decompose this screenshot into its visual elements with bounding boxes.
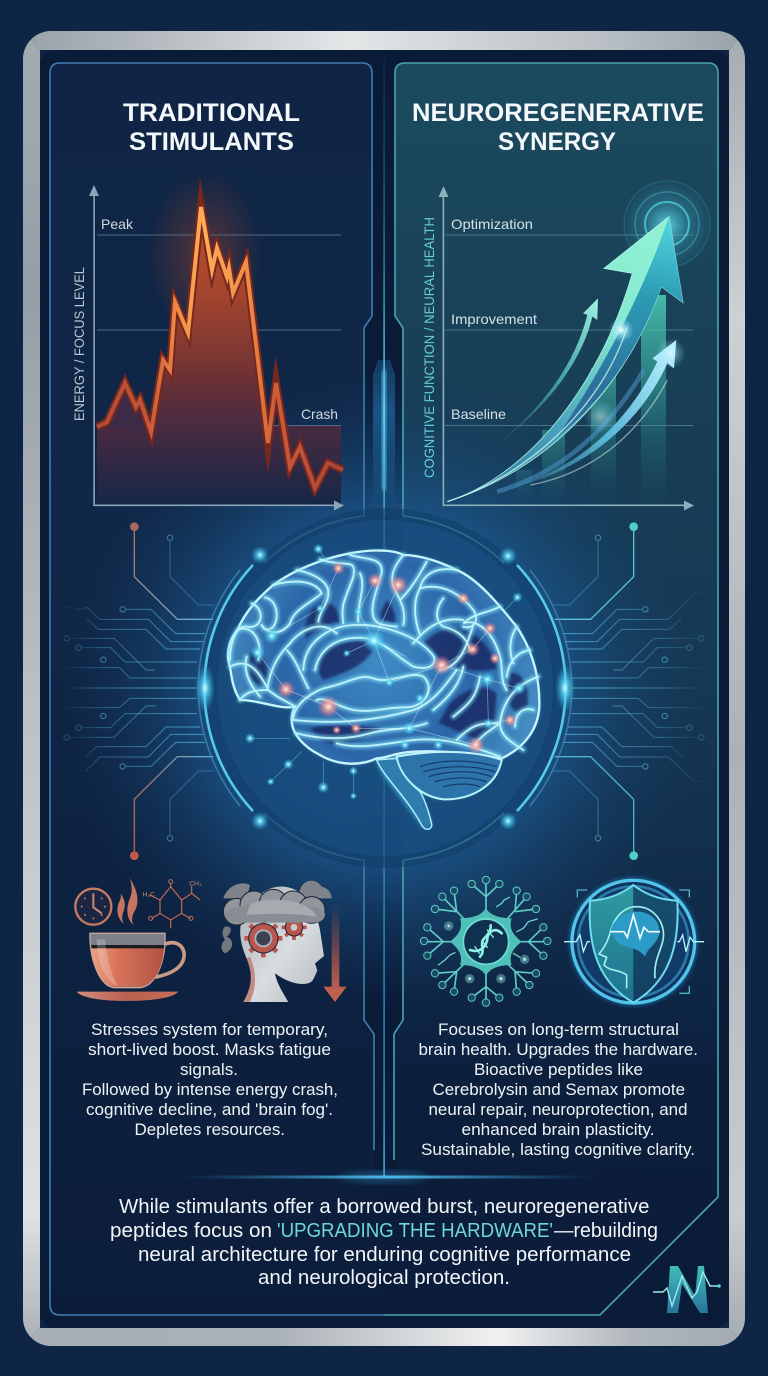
- description: neuroregenerative: enhanced brain plasticity.: [462, 1120, 654, 1139]
- icons: peptide side: [420, 876, 704, 1006]
- brain emblem ring: [195, 514, 575, 862]
- chart labels: Optimization: [451, 216, 533, 232]
- icon: caffeine molecule: CH₃: [189, 880, 202, 887]
- chart labels: [451, 216, 537, 422]
- dna helix: [470, 925, 502, 957]
- growth arrows: [447, 217, 686, 502]
- icon: neuron with dna: [420, 876, 551, 1006]
- brain illustration: [228, 544, 539, 829]
- circuit traces: right: [553, 522, 711, 860]
- description: stimulants: Followed by intense energy crash,: [82, 1080, 338, 1099]
- icon: neural shield: [564, 878, 704, 1006]
- background fills of comparison columns: [50, 63, 718, 1315]
- description: stimulants: [82, 1020, 338, 1139]
- cerebellum: [397, 752, 502, 799]
- cortical folds: [230, 555, 538, 757]
- description: neuroregenerative: Focuses on long-term structural: [438, 1020, 679, 1039]
- heading: neuroregenerative synergy: NEUROREGENERATIVE: [412, 99, 704, 127]
- icon: foggy head with gears and down arrow: [221, 881, 347, 1002]
- chart labels: Improvement: [451, 311, 537, 327]
- conclusion text: While stimulants offer a borrowed burst, neuroregenerative: [119, 1196, 650, 1218]
- conclusion text: and neurological protection.: [258, 1267, 510, 1289]
- floating peptide fragments: [444, 921, 529, 983]
- pink activity points: [277, 562, 517, 754]
- y axis title: cognitive function / neural health: COGNITIVE FUNCTION / NEURAL HEALTH: [421, 217, 437, 478]
- conclusion text: —rebuilding: [554, 1220, 658, 1242]
- icon: steam: [117, 878, 137, 925]
- icon: caffeine molecule: H₃C: [143, 892, 155, 899]
- gears: [244, 915, 307, 957]
- circuit traces: left: [57, 522, 215, 860]
- description: neuroregenerative: Sustainable, lasting cognitive clarity.: [421, 1140, 695, 1159]
- description: stimulants: Depletes resources.: [134, 1120, 285, 1139]
- brain body: [228, 551, 539, 764]
- head and brain inside shield: [610, 907, 663, 978]
- central glowing spine: [180, 60, 596, 1182]
- chart: rising cognitive function: [421, 179, 713, 510]
- brain stem: [377, 758, 432, 829]
- description: neuroregenerative: Cerebrolysin and Semax promote: [432, 1080, 685, 1099]
- bars behind arrows: [516, 295, 666, 504]
- icon: clock: [75, 889, 111, 925]
- y axis title: energy / focus level: ENERGY / FOCUS LEVEL: [72, 267, 87, 421]
- chart labels: Peak: [101, 216, 134, 232]
- description: neuroregenerative: Bioactive peptides like: [474, 1060, 643, 1079]
- description: neuroregenerative: [418, 1020, 698, 1159]
- panel: traditional stimulants: [50, 63, 384, 1315]
- floating synapse nodes: [245, 544, 523, 800]
- logo mark: [653, 1266, 721, 1313]
- target rings: [621, 179, 713, 271]
- panel outline: left: [50, 63, 384, 1315]
- description: stimulants: short-lived boost. Masks fatigue: [88, 1040, 331, 1059]
- chart axes: [438, 186, 694, 510]
- description: stimulants: cognitive decline, and 'brain fog'.: [86, 1100, 333, 1119]
- chart axes: [89, 185, 344, 510]
- neural filaments: [257, 568, 519, 745]
- conclusion text: 'UPGRADING THE HARDWARE': [277, 1220, 553, 1242]
- panel outline: right: [384, 63, 718, 1315]
- icon: coffee cup: [77, 933, 184, 1001]
- description: stimulants: signals.: [180, 1060, 238, 1079]
- heading: traditional stimulants: [123, 99, 300, 156]
- chart labels: [101, 216, 338, 422]
- heading: traditional stimulants: STIMULANTS: [129, 128, 294, 156]
- chart labels: Crash: [301, 406, 338, 422]
- pulse lines and corner brackets: [564, 890, 704, 993]
- panel: neuroregenerative synergy: [384, 63, 718, 1315]
- fog clouds: [221, 881, 332, 953]
- heading: neuroregenerative synergy: [412, 99, 704, 156]
- description: neuroregenerative: brain health. Upgrades the hardware.: [418, 1040, 698, 1059]
- heading: traditional stimulants: TRADITIONAL: [123, 99, 300, 127]
- dark pockets between folds: [247, 600, 528, 744]
- blue activity points: [250, 604, 526, 750]
- chart labels: Baseline: [451, 406, 506, 422]
- ring glow nodes: [195, 546, 575, 830]
- conclusion text: [110, 1196, 658, 1289]
- conclusion text: peptides focus on: [110, 1220, 272, 1242]
- icon: caffeine molecule: [143, 880, 202, 928]
- blurred fold glow: [230, 555, 538, 757]
- description: neuroregenerative: neural repair, neuroprotection, and: [428, 1100, 688, 1119]
- chart: energy spike and crash: [72, 170, 344, 510]
- brain outer glow: [228, 551, 539, 828]
- conclusion text: neural architecture for enduring cognitive performance: [138, 1244, 631, 1266]
- heading: neuroregenerative synergy: SYNERGY: [498, 128, 616, 156]
- icons: stimulant side: [75, 878, 347, 1002]
- description: stimulants: Stresses system for temporary,: [91, 1020, 328, 1039]
